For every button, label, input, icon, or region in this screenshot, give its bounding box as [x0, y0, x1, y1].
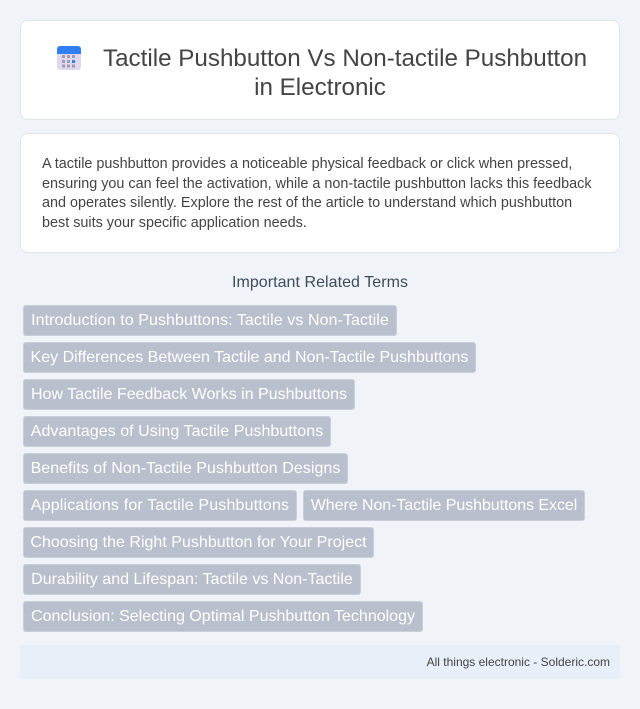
tag: introduction: Introduction to Pushbuttons: Tactile vs Non-Tactile	[31, 312, 389, 329]
tag: key differences: Key Differences Between Tactile and Non-Tactile Pushbuttons	[31, 349, 468, 366]
footer bar	[20, 645, 620, 679]
tag: key differences	[23, 342, 476, 373]
tag: applications	[23, 490, 297, 521]
tag: tactile feedback	[23, 379, 355, 410]
intro paragraph: A tactile pushbutton provides a noticeable physical feedback or click when pressed,	[42, 156, 572, 172]
intro text panel	[20, 133, 620, 253]
tag: benefits	[23, 453, 348, 484]
title: in Electronic	[254, 74, 386, 101]
tag: conclusion	[23, 601, 423, 632]
tag: tactile feedback: How Tactile Feedback Works in Pushbuttons	[31, 386, 347, 403]
icon: calendar grid	[57, 46, 81, 70]
header panel	[20, 20, 620, 120]
tag: choosing: Choosing the Right Pushbutton for Your Project	[30, 534, 367, 551]
tag: applications: Applications for Tactile Pushbuttons	[31, 497, 289, 514]
title: Tactile Pushbutton Vs Non-tactile Pushbutton	[103, 45, 587, 72]
intro paragraph: and operates silently. Explore the rest of the article to understand which pushbutton	[42, 195, 572, 211]
intro paragraph	[42, 156, 592, 231]
tag: where non-tactile excel	[303, 490, 585, 521]
intro paragraph: best suits your specific application needs.	[42, 215, 307, 231]
tag: advantages	[23, 416, 331, 447]
tag: advantages: Advantages of Using Tactile Pushbuttons	[31, 423, 323, 440]
tag: benefits: Benefits of Non-Tactile Pushbutton Designs	[31, 460, 340, 477]
tag: conclusion: Conclusion: Selecting Optimal Pushbutton Technology	[31, 608, 415, 625]
tag: choosing	[23, 527, 374, 558]
tag: durability	[23, 564, 361, 595]
intro paragraph: ensuring you can feel the activation, while a non-tactile pushbutton lacks this feedback	[42, 176, 592, 192]
related terms tag list	[23, 305, 585, 632]
tag: durability: Durability and Lifespan: Tactile vs Non-Tactile	[31, 571, 353, 588]
footer credit: All things electronic - Solderic.com	[427, 655, 610, 669]
section heading: Important Related Terms	[232, 274, 408, 291]
title	[103, 45, 587, 101]
tag: where non-tactile excel: Where Non-Tactile Pushbuttons Excel	[311, 497, 577, 514]
tag: introduction	[23, 305, 397, 336]
